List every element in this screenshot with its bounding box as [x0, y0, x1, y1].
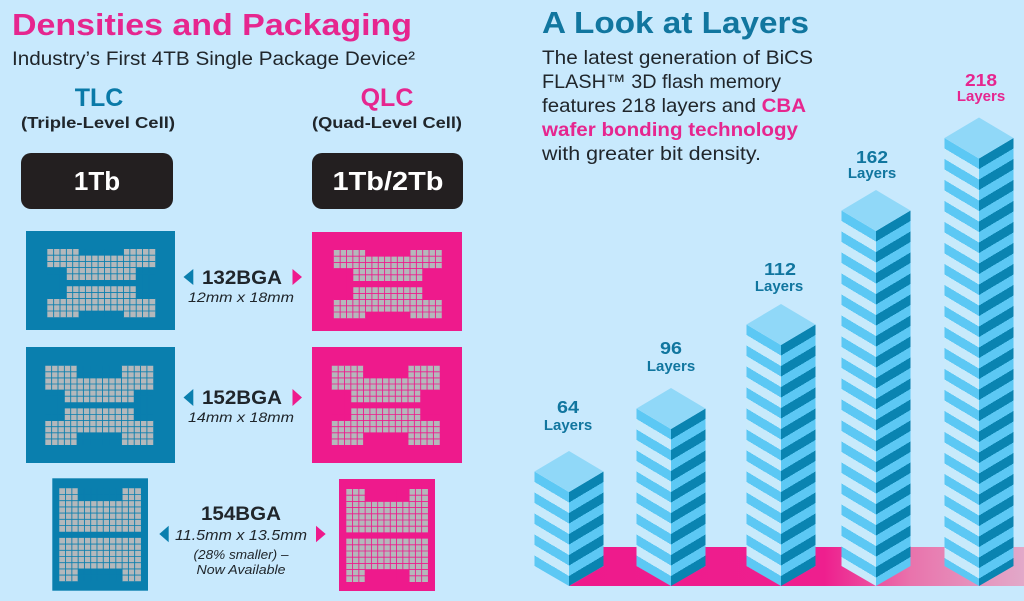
chip: TLC 152BGA	[26, 347, 175, 463]
label: 152BGA: 152BGA	[202, 388, 282, 409]
label: 64 layers	[544, 397, 592, 434]
density badge: 1Tb/2Tb	[312, 153, 463, 209]
heading: densities and packaging: Densities and Packaging	[12, 7, 412, 42]
label: 152BGA	[184, 388, 302, 425]
paragraph: BiCS FLASH description: The latest generation of BiCS	[542, 47, 813, 69]
label: 218 layers	[957, 70, 1005, 105]
paragraph: BiCS FLASH description: with greater bit density.	[541, 143, 761, 165]
paragraph: BiCS FLASH description: features 218 layers and CBA	[542, 95, 806, 117]
column heading: TLC: (Triple-Level Cell)	[21, 115, 175, 132]
label: 154BGA: 154BGA	[201, 504, 281, 525]
label: 96 layers: 96	[660, 338, 682, 358]
label: 132BGA	[184, 268, 302, 305]
label: 162 layers: Layers	[848, 165, 896, 182]
label: 112 layers: 112	[764, 259, 796, 279]
tower: 218 layers	[944, 118, 1014, 586]
chip: QLC 132BGA	[312, 232, 462, 331]
column heading: QLC: (Quad-Level Cell)	[312, 115, 462, 132]
tower: 96 layers	[636, 388, 706, 586]
column heading: QLC: QLC	[361, 84, 413, 112]
label: 132BGA: 132BGA	[202, 268, 282, 289]
label: 218 layers: 218	[965, 70, 997, 90]
tower: 64 layers	[534, 451, 604, 586]
chip: TLC 154BGA	[52, 478, 148, 591]
chip: TLC 132BGA	[26, 231, 175, 330]
label: 218 layers: Layers	[957, 88, 1005, 105]
label: 154BGA	[159, 504, 326, 577]
tower: 162 layers	[842, 190, 910, 586]
paragraph: BiCS FLASH description: wafer bonding technology	[541, 119, 798, 141]
heading: a look at layers: A Look at Layers	[542, 5, 809, 40]
density badge: 1Tb: 1Tb	[74, 166, 120, 196]
label: 154BGA: Now Available	[196, 563, 286, 577]
column heading: QLC	[312, 84, 462, 132]
chip: QLC 154BGA	[339, 479, 435, 591]
paragraph: BiCS FLASH description	[541, 47, 813, 165]
label: 162 layers: 162	[856, 147, 888, 167]
pink base band	[569, 547, 1024, 586]
density badge: 1Tb/2Tb: 1Tb/2Tb	[332, 166, 444, 196]
chip: QLC 152BGA	[312, 347, 462, 463]
subheading: industry's first 4TB: Industry’s First 4TB Single Package Device²	[12, 49, 415, 70]
label: 132BGA: 12mm x 18mm	[188, 289, 294, 305]
label: 152BGA: 14mm x 18mm	[188, 409, 294, 425]
label: 64 layers: 64	[557, 397, 579, 417]
label: 154BGA: (28% smaller) –	[194, 548, 290, 562]
label: 154BGA: 11.5mm x 13.5mm	[175, 527, 307, 544]
label: 96 layers	[647, 338, 695, 375]
column heading: TLC: TLC	[75, 84, 123, 112]
paragraph: BiCS FLASH description: FLASH™ 3D flash memory	[542, 71, 781, 93]
density badge: 1Tb	[21, 153, 173, 209]
label: 96 layers: Layers	[647, 358, 695, 375]
label: 162 layers	[848, 147, 896, 182]
label: 64 layers: Layers	[544, 417, 592, 434]
label: 112 layers: Layers	[755, 278, 803, 295]
column heading: TLC	[21, 84, 175, 132]
label: 112 layers	[755, 259, 803, 295]
tower: 112 layers	[746, 304, 816, 586]
